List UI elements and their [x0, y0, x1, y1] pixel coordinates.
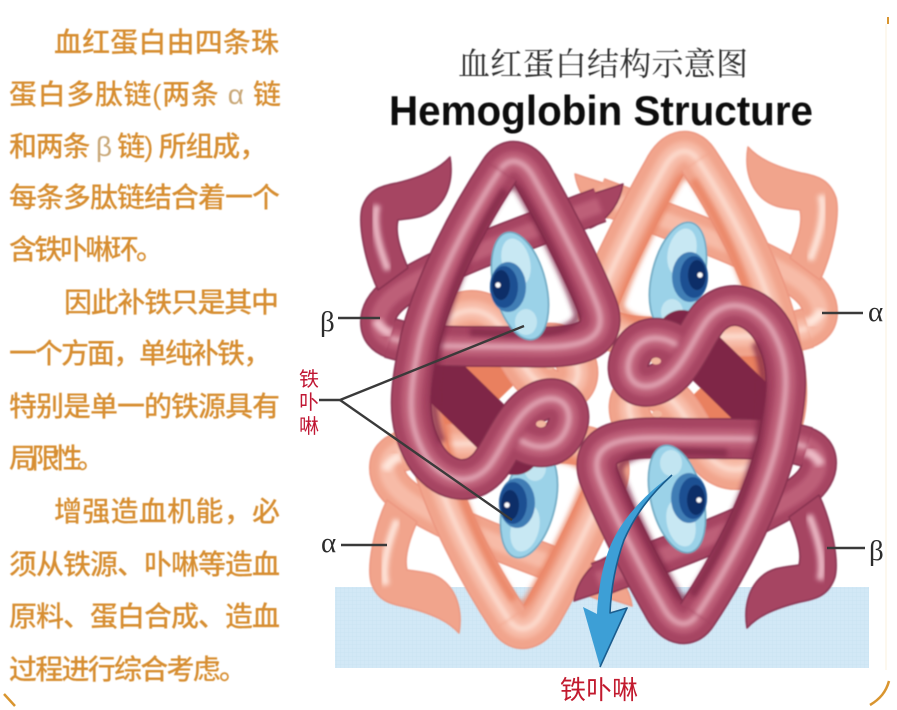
label: beta upper left — [320, 306, 380, 338]
alpha chain: lower left — [370, 311, 632, 633]
title: English: Hemoglobin Structure — [389, 87, 813, 134]
text line 5: 含铁卟啉环。 — [9, 234, 164, 265]
beta chain: upper left — [361, 157, 623, 479]
leader lines: iron porphyrin — [319, 326, 524, 520]
label: beta upper left: β — [320, 306, 335, 338]
arrow: iron porphyrin release — [583, 475, 672, 667]
text line 3: 和两条 β 链) 所组成， — [9, 131, 267, 162]
label: alpha lower left: α — [321, 527, 336, 559]
shadow panel: pale blue floor — [335, 587, 869, 668]
text line 4: 每条多肽链结合着一个 — [9, 182, 280, 213]
text line 11: 须从铁源、卟啉等造血 — [9, 549, 280, 580]
text line 13: 过程进行综合考虑。 — [9, 654, 247, 685]
label: iron porphyrin vertical: 啉 — [299, 415, 319, 438]
title: Chinese: 血红蛋白结构示意图 — [458, 39, 748, 85]
text line 9: 局限性。 — [9, 443, 105, 474]
label: iron porphyrin vertical: 铁 — [299, 368, 319, 391]
text line 8: 特别是单一的铁源具有 — [9, 391, 280, 422]
label: alpha upper right: α — [868, 296, 883, 328]
text line 6: 因此补铁只是其中 — [64, 287, 279, 318]
text line 2: 蛋白多肽链(两条 α 链 — [9, 79, 281, 110]
label: beta lower right — [827, 535, 884, 567]
text line 10: 增强造血机能，必 — [54, 496, 280, 527]
panel: explanatory text — [9, 27, 281, 685]
text line 12: 原料、蛋白合成、造血 — [9, 601, 280, 632]
text line 7: 一个方面，单纯补铁， — [9, 338, 271, 369]
label: iron porphyrin vertical — [299, 368, 319, 438]
label: alpha lower left — [321, 527, 387, 559]
label: beta lower right: β — [869, 535, 884, 567]
label: iron porphyrin bottom: 铁卟啉 — [560, 675, 638, 705]
label: iron porphyrin vertical: 卟 — [299, 391, 319, 414]
alpha chain: upper right — [575, 147, 837, 469]
text line 1: 血红蛋白由四条珠 — [54, 27, 279, 58]
chart: hemoglobin structure illustration — [361, 147, 837, 633]
label: alpha upper right — [822, 296, 883, 328]
beta chain: lower right — [574, 306, 836, 628]
